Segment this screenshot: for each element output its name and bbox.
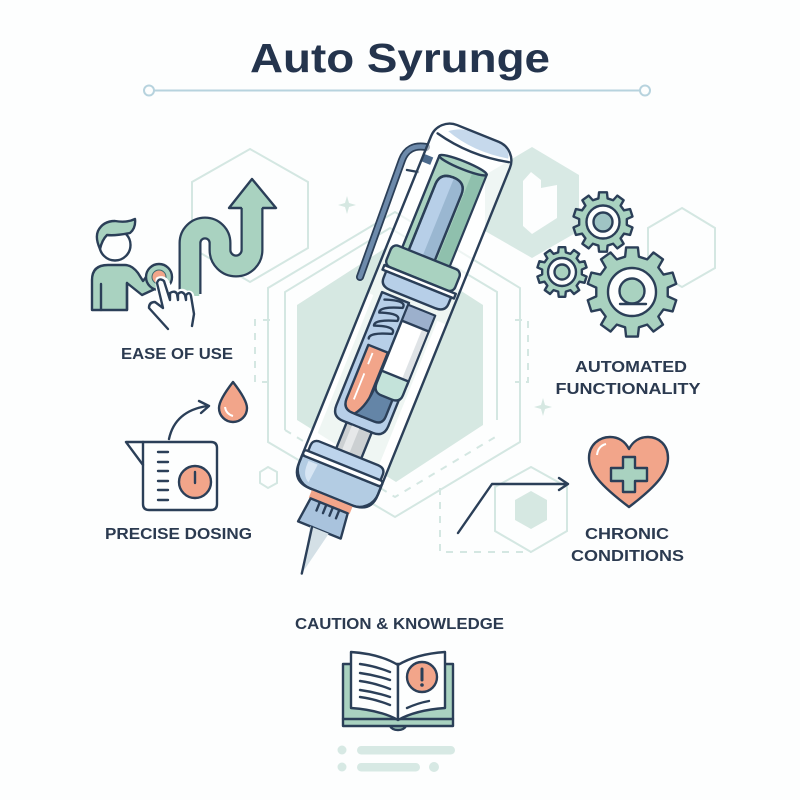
background hexagons xyxy=(192,147,715,552)
icon: measuring beaker xyxy=(126,442,217,510)
medicine holder xyxy=(332,292,434,437)
upper collar xyxy=(377,244,464,313)
icon: winding arrow xyxy=(190,179,276,296)
pen body fill xyxy=(292,118,517,513)
label: automated functionality: FUNCTIONALITY xyxy=(556,381,701,398)
white cartridge xyxy=(373,305,435,403)
label: chronic conditions xyxy=(571,526,684,565)
icon: person pressing button xyxy=(92,219,172,310)
orange band xyxy=(309,490,353,514)
person body xyxy=(92,265,157,310)
icon: gears xyxy=(537,192,676,337)
grey shaft xyxy=(332,422,372,470)
auto syringe pen xyxy=(261,118,517,589)
label: automated functionality: AUTOMATED xyxy=(575,359,687,376)
lower cap xyxy=(292,437,388,513)
dark plunger fluid xyxy=(355,381,395,425)
pen body outline xyxy=(292,118,517,513)
title divider xyxy=(144,86,650,96)
label: chronic conditions: CHRONIC xyxy=(585,526,669,543)
gear: medium xyxy=(574,192,632,252)
label: caution and knowledge: CAUTION & KNOWLEDGE xyxy=(295,616,504,633)
placeholder text lines xyxy=(338,746,455,772)
orange medicine xyxy=(342,345,388,417)
mint plunger xyxy=(373,371,409,403)
icon: open book xyxy=(343,652,453,730)
button xyxy=(146,264,172,290)
clip connector xyxy=(421,154,433,165)
icon: heart xyxy=(589,437,668,507)
medical cross xyxy=(611,457,647,492)
hair xyxy=(97,219,135,249)
icon: drop xyxy=(219,382,247,422)
cap inner line xyxy=(436,133,509,166)
pen top cap highlight xyxy=(446,124,512,161)
label: chronic conditions: CONDITIONS xyxy=(571,548,684,565)
gear: large xyxy=(588,247,676,337)
person head xyxy=(100,230,130,260)
gear: small xyxy=(537,247,587,297)
needle xyxy=(293,526,329,577)
book spine bump xyxy=(390,726,406,730)
icon: pen clip xyxy=(360,147,426,277)
dial xyxy=(179,466,211,498)
needle hub xyxy=(298,497,350,539)
label: ease of use: EASE OF USE xyxy=(121,346,233,363)
right page xyxy=(398,652,445,720)
book cover xyxy=(343,664,453,726)
arrow to drop xyxy=(169,401,209,439)
warning circle xyxy=(407,662,437,692)
green cylinder xyxy=(400,152,488,271)
title: Auto Syrunge xyxy=(250,35,550,81)
arrow to heart xyxy=(458,478,568,533)
label: automated functionality xyxy=(556,359,701,398)
label: precise dosing: PRECISE DOSING xyxy=(105,526,252,543)
left page xyxy=(351,652,398,720)
icon: pointing hand xyxy=(148,280,194,328)
inner blue capsule xyxy=(407,172,466,265)
spring xyxy=(369,296,405,346)
hand outline xyxy=(149,279,194,329)
